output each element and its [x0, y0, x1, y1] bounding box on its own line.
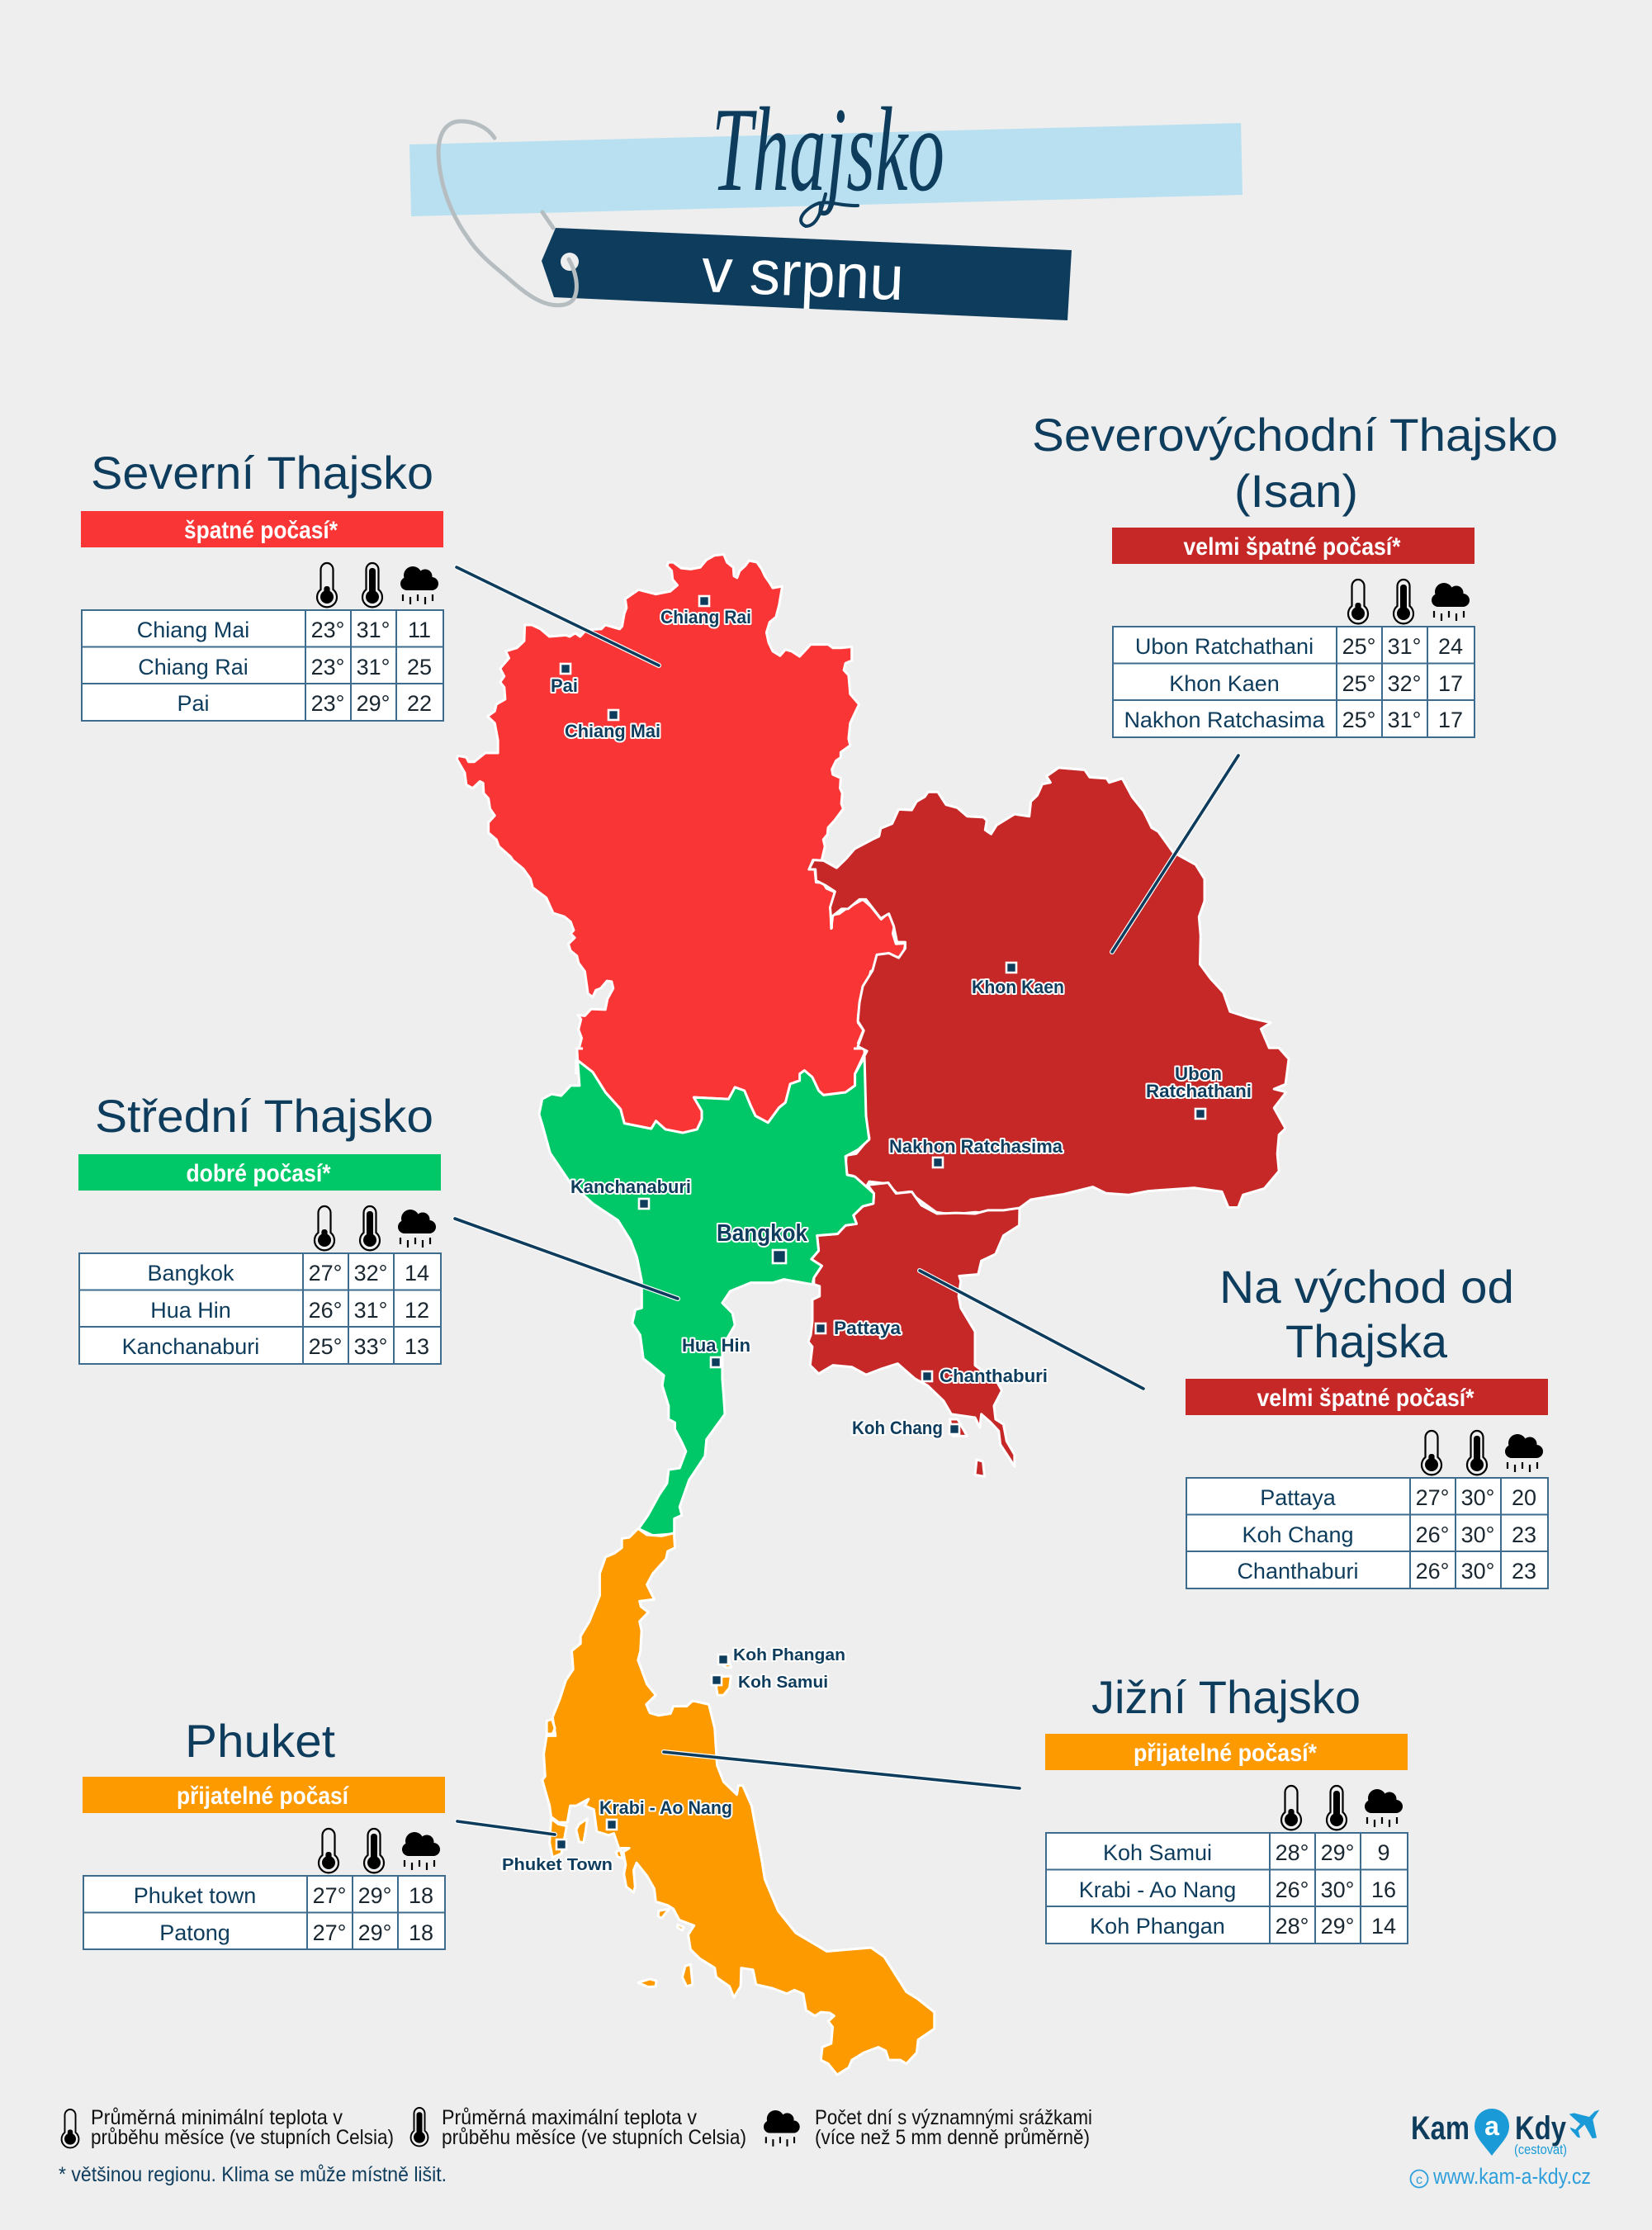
panel: Na východ od Thajska: [1186, 1261, 1548, 1588]
rating bar and table: 32°: [1388, 671, 1421, 696]
rating bar: špatné počasí*: [184, 517, 338, 544]
climate table: 31°: [357, 655, 390, 679]
city: Hua Hin: Hua Hin: [682, 1335, 750, 1356]
climate table: 25: [407, 655, 432, 679]
rating bar and table: 30°: [1461, 1485, 1494, 1510]
climate table: 23°: [311, 691, 344, 716]
rating bar and table: 23: [1512, 1559, 1536, 1584]
climate table: 23°: [311, 618, 344, 642]
website: c: [1416, 2173, 1422, 2187]
city: Hua Hin: [682, 1335, 750, 1367]
panel: Phuket: [83, 1715, 445, 1949]
map of Thailand: [457, 555, 1289, 2075]
region: north-east (Isan): [809, 768, 1289, 1214]
rating bar and table: 33°: [354, 1334, 387, 1359]
rating bar and table: 14: [405, 1261, 429, 1285]
region: north: [457, 555, 906, 1133]
rating bar and table: 17: [1438, 708, 1463, 732]
rating bar and table: 27°: [309, 1261, 342, 1285]
logo letter: a: a: [1484, 2111, 1499, 2141]
legend: [62, 2106, 1092, 2149]
rating bar and table: 27°: [313, 1883, 346, 1908]
city: Nakhon Ratchasima: Nakhon Ratchasima: [889, 1136, 1063, 1157]
rating bar and table: 31°: [1388, 634, 1421, 659]
title swash: [801, 194, 858, 226]
logo word: Kdy: Kdy: [1515, 2110, 1567, 2147]
legend: rain days: Počet dní s významnými srážkami: [815, 2106, 1092, 2129]
rating bar and table: 25°: [1342, 634, 1375, 659]
rating bar and table: Hua Hin: [150, 1298, 231, 1323]
subtitle: v srpnu: [700, 235, 906, 314]
city: Chanthaburi: Chanthaburi: [940, 1366, 1048, 1386]
climate table: 22: [407, 691, 432, 716]
column icons: [317, 563, 438, 607]
title: Thajsko: [712, 83, 944, 216]
panel: Severní Thajsko: [81, 447, 443, 721]
website: www.kam-a-kdy.cz: [1432, 2164, 1591, 2189]
footnote: * většinou regionu. Klima se může místně lišit.: [59, 2163, 447, 2186]
rating bar and table: Khon Kaen: [1169, 671, 1280, 696]
climate table: 11: [408, 618, 431, 642]
heading: [1219, 1261, 1514, 1367]
panel: Střední Thajsko: [78, 1090, 441, 1364]
rating bar and table: 18: [409, 1883, 433, 1908]
rating bar and table: Kanchanaburi: [122, 1334, 259, 1359]
rating bar and table: 13: [405, 1334, 429, 1359]
city: Chiang Mai: Chiang Mai: [565, 721, 660, 741]
heading: Jižní Thajsko: [1091, 1671, 1361, 1723]
rating bar and table: 24: [1438, 634, 1463, 659]
rating bar: [81, 511, 443, 547]
city: Bangkok: Bangkok: [717, 1220, 808, 1247]
rating bar and table: 26°: [309, 1298, 342, 1323]
city: Pai: Pai: [551, 675, 578, 696]
rating bar and table: Ubon Ratchathani: [1135, 634, 1314, 659]
rating bar and table: 29°: [1321, 1914, 1354, 1939]
title block: [409, 83, 1243, 320]
rating bar and table: 30°: [1321, 1877, 1354, 1902]
rating bar and table: Nakhon Ratchasima: [1124, 708, 1326, 732]
climate table: Pai: [177, 691, 210, 716]
rating bar and table: 28°: [1276, 1840, 1309, 1865]
title band: [409, 123, 1243, 216]
city: Phuket Town: [502, 1839, 613, 1874]
logo word: Kam: Kam: [1411, 2110, 1470, 2147]
heading: Severovýchodní Thajsko: [1032, 409, 1558, 461]
heading: Phuket: [185, 1715, 335, 1767]
rating bar and table: Koh Samui: [1103, 1840, 1212, 1865]
rating bar and table: 12: [405, 1298, 429, 1323]
city: Khon Kaen: Khon Kaen: [972, 977, 1064, 997]
climate table: 31°: [357, 618, 390, 642]
subtitle tag: [542, 228, 1072, 320]
city: Chiang Rai: Chiang Rai: [660, 607, 751, 627]
rating bar and table: [1112, 528, 1474, 737]
rating bar and table: velmi špatné počasí*: [1257, 1385, 1474, 1412]
rating bar and table: Bangkok: [147, 1261, 234, 1285]
climate table: Chiang Rai: [138, 655, 249, 679]
region: south: [542, 1528, 935, 2075]
rating bar and table: 27°: [1416, 1485, 1449, 1510]
rating bar and table: 14: [1371, 1914, 1396, 1939]
city: Pai: [551, 664, 578, 696]
climate table: [82, 610, 443, 721]
rating bar and table: Krabi - Ao Nang: [1079, 1877, 1236, 1902]
icon: map pin: [1474, 2109, 1509, 2156]
rating bar and table: Koh Phangan: [1090, 1914, 1225, 1939]
heading: Střední Thajsko: [95, 1090, 433, 1142]
rating bar and table: přijatelné počasí: [177, 1783, 349, 1810]
legend: maximum temperature: průběhu měsíce (ve stupních Celsia): [442, 2126, 746, 2149]
legend: minimum temperature: Průměrná minimální teplota v: [91, 2106, 343, 2129]
icon: plane: [1569, 2109, 1599, 2138]
rating bar and table: velmi špatné počasí*: [1184, 533, 1401, 561]
rating bar and table: 25°: [1342, 671, 1375, 696]
rating bar and table: [83, 1777, 445, 1949]
logo: Kam a Kdy: [1410, 2109, 1599, 2189]
rating bar and table: Koh Chang: [1242, 1522, 1354, 1547]
heading: Severní Thajsko: [91, 447, 433, 499]
heading: Na východ od: [1219, 1261, 1514, 1313]
city labels: [502, 596, 1252, 1874]
climate table: 23°: [311, 655, 344, 679]
city: Pattaya: Pattaya: [834, 1318, 902, 1338]
rating bar and table: 26°: [1416, 1559, 1449, 1584]
city: Ubon Ratchathani: Ubon: [1175, 1063, 1222, 1084]
tag hole: [561, 253, 579, 271]
heading: [1032, 409, 1558, 517]
legend: minimum temperature: [62, 2106, 394, 2149]
city: Koh Chang: Koh Chang: [852, 1418, 943, 1438]
rating bar and table: 16: [1371, 1877, 1396, 1902]
rating bar and table: [1045, 1734, 1408, 1944]
city: Chiang Mai: [565, 710, 660, 741]
rating bar and table: 29°: [1321, 1840, 1354, 1865]
rating bar and table: [78, 1154, 441, 1364]
rating bar and table: 32°: [354, 1261, 387, 1285]
rating bar and table: 20: [1512, 1485, 1536, 1510]
panel: Jižní Thajsko: [1045, 1671, 1408, 1944]
rating bar and table: 30°: [1461, 1559, 1494, 1584]
rating bar and table: 29°: [358, 1920, 391, 1945]
city: Krabi - Ao Nang: Krabi - Ao Nang: [599, 1797, 732, 1818]
city: Kanchanaburi: Kanchanaburi: [570, 1177, 691, 1197]
city: Phuket Town: Phuket Town: [502, 1856, 613, 1874]
city: Ubon Ratchathani: Ratchathani: [1146, 1081, 1252, 1101]
heading: Thajska: [1285, 1315, 1448, 1367]
rating bar and table: 31°: [354, 1298, 387, 1323]
heading: (Isan): [1234, 465, 1358, 517]
rating bar and table: 25°: [309, 1334, 342, 1359]
logo tagline: (cestovat): [1514, 2142, 1567, 2157]
city: Bangkok: [717, 1220, 808, 1263]
rating bar and table: dobré počasí*: [187, 1160, 331, 1187]
legend: rain days: [764, 2106, 1092, 2149]
rating bar and table: 25°: [1342, 708, 1375, 732]
rating bar and table: 17: [1438, 671, 1463, 696]
city: Koh Phangan: Koh Phangan: [733, 1646, 845, 1664]
rating bar and table: Patong: [159, 1920, 230, 1945]
legend: maximum temperature: Průměrná maximální teplota v: [442, 2106, 697, 2129]
rating bar and table: [1186, 1379, 1548, 1588]
city: Koh Samui: Koh Samui: [738, 1674, 828, 1692]
region: east: [808, 1182, 1020, 1476]
legend: maximum temperature: [411, 2106, 746, 2149]
rating bar and table: 29°: [358, 1883, 391, 1908]
panel: Severovýchodní Thajsko (Isan): [1032, 409, 1558, 737]
climate table: Chiang Mai: [137, 618, 249, 642]
tag string: [438, 121, 576, 305]
rating bar and table: 18: [409, 1920, 433, 1945]
rating bar and table: 26°: [1276, 1877, 1309, 1902]
city: Ubon Ratchathani: [1146, 1063, 1252, 1119]
rating bar and table: 30°: [1461, 1522, 1494, 1547]
rating bar and table: 26°: [1416, 1522, 1449, 1547]
rating bar and table: 31°: [1388, 708, 1421, 732]
city: Nakhon Ratchasima: [889, 1136, 1063, 1167]
rating bar and table: 27°: [313, 1920, 346, 1945]
rating bar and table: přijatelné počasí*: [1134, 1740, 1317, 1767]
rating bar and table: 28°: [1276, 1914, 1309, 1939]
legend: rain days: (více než 5 mm denně průměrně): [815, 2126, 1090, 2149]
city: Krabi - Ao Nang: [599, 1797, 732, 1830]
city: Chiang Rai: [660, 596, 751, 627]
city: Kanchanaburi: [570, 1177, 691, 1209]
region: central: [539, 1057, 874, 1536]
rating bar and table: 23: [1512, 1522, 1536, 1547]
rating bar and table: 9: [1377, 1840, 1390, 1865]
climate table: 29°: [357, 691, 390, 716]
rating bar and table: Chanthaburi: [1237, 1559, 1359, 1584]
legend: minimum temperature: průběhu měsíce (ve stupních Celsia): [91, 2126, 394, 2149]
rating bar and table: Phuket town: [134, 1883, 256, 1908]
rating bar and table: Pattaya: [1260, 1485, 1337, 1510]
city: Khon Kaen: [972, 963, 1064, 997]
connector lines: [455, 567, 1238, 1835]
